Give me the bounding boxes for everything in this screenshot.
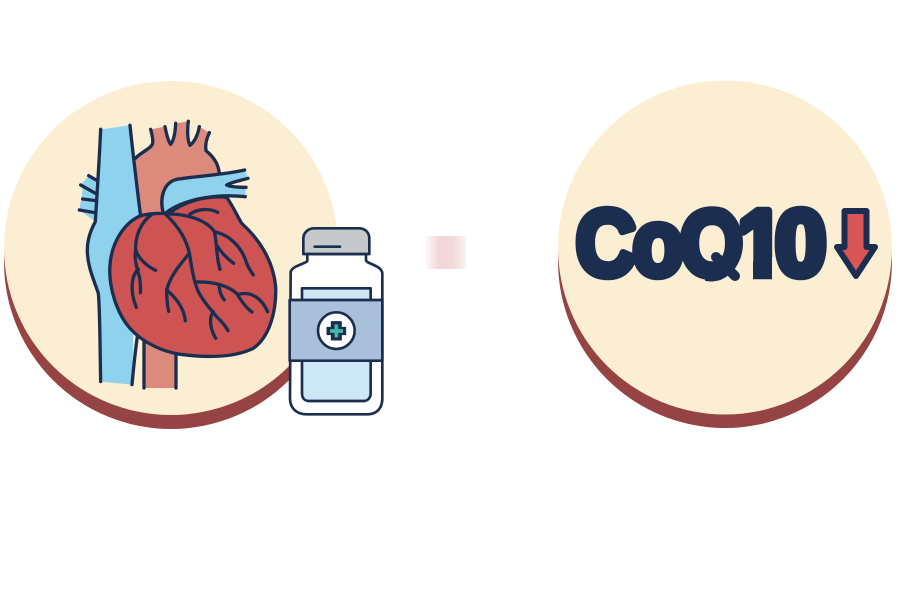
bottle body: [290, 254, 382, 414]
aorta: [135, 121, 219, 388]
label: [290, 300, 382, 361]
text: CoQ10: Co: [576, 190, 683, 295]
vena cava: [79, 125, 141, 385]
faded arrow placeholder: [425, 236, 466, 269]
icon: medicine bottle: [290, 228, 382, 414]
coronary vessels: [132, 210, 268, 338]
text: CoQ10: 1: [738, 190, 784, 295]
cap line: [315, 243, 340, 251]
icon: heart: [79, 121, 276, 388]
panel: right circle: [558, 80, 892, 428]
text: CoQ10: Q: [680, 190, 744, 295]
medical cross: [327, 322, 346, 340]
icon: down arrow: [837, 211, 875, 276]
text: CoQ10: 0: [775, 191, 826, 295]
text: CoQ10: [576, 206, 827, 282]
heart muscle: [110, 197, 276, 356]
bottle cap: [303, 228, 369, 254]
label circle: [318, 312, 355, 349]
pulmonary artery: [162, 170, 248, 213]
liquid: [302, 288, 371, 401]
panel: left circle: [4, 81, 338, 429]
